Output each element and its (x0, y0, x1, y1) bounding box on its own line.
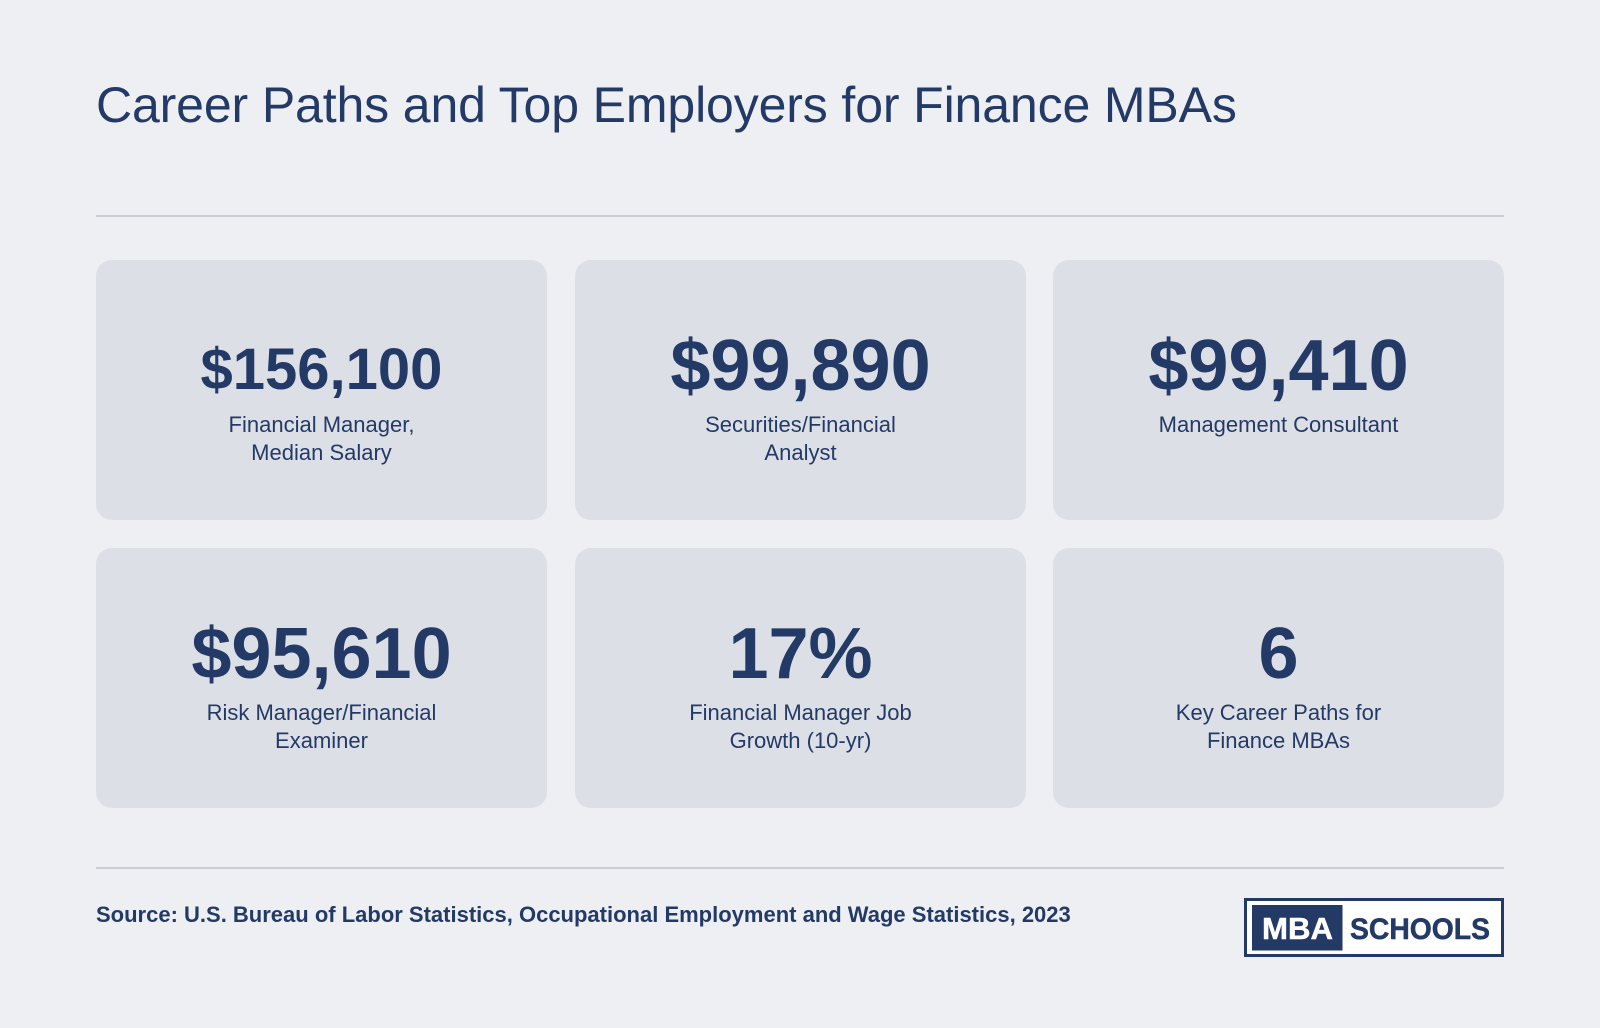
stat label: Financial Manager Job (689, 700, 912, 725)
stat label: Growth (10-yr) (730, 728, 871, 753)
stat label (705, 412, 896, 465)
panel: job growth (575, 548, 1026, 808)
stat value: 17% (728, 614, 873, 694)
panel: key career paths (1053, 548, 1504, 808)
stat value: $95,610 (191, 614, 452, 694)
stat label: Analyst (764, 440, 837, 465)
stat label (229, 412, 414, 465)
stat label (689, 700, 912, 753)
stat label (1176, 700, 1381, 753)
title: Career Paths and Top Employers for Finance MBAs (96, 77, 1237, 133)
source note: Source: U.S. Bureau of Labor Statistics, Occupational Employment and Wage Statistics, 2023 (96, 902, 1071, 927)
stat value: $99,890 (670, 326, 931, 406)
stat label: Median Salary (251, 440, 392, 465)
panel: risk manager salary (96, 548, 547, 808)
logo: MBA Schools: SCHOOLS (1350, 913, 1490, 946)
stat label: Examiner (275, 728, 368, 753)
stat value: $156,100 (201, 337, 442, 402)
stat value: 6 (1258, 614, 1299, 694)
stat label (207, 700, 436, 753)
panel: management consultant salary (1053, 260, 1504, 520)
stat label: Securities/Financial (705, 412, 896, 437)
panel: securities analyst salary (575, 260, 1026, 520)
stat value: $99,410 (1148, 326, 1409, 406)
logo: MBA Schools (1244, 898, 1504, 957)
stat label: Finance MBAs (1207, 728, 1350, 753)
stat label: Risk Manager/Financial (207, 700, 436, 725)
stat label: Key Career Paths for (1176, 700, 1381, 725)
logo: MBA Schools: MBA (1262, 911, 1333, 946)
stat label: Financial Manager, (229, 412, 414, 437)
panel: financial manager salary (96, 260, 547, 520)
stat label: Management Consultant (1159, 412, 1398, 437)
